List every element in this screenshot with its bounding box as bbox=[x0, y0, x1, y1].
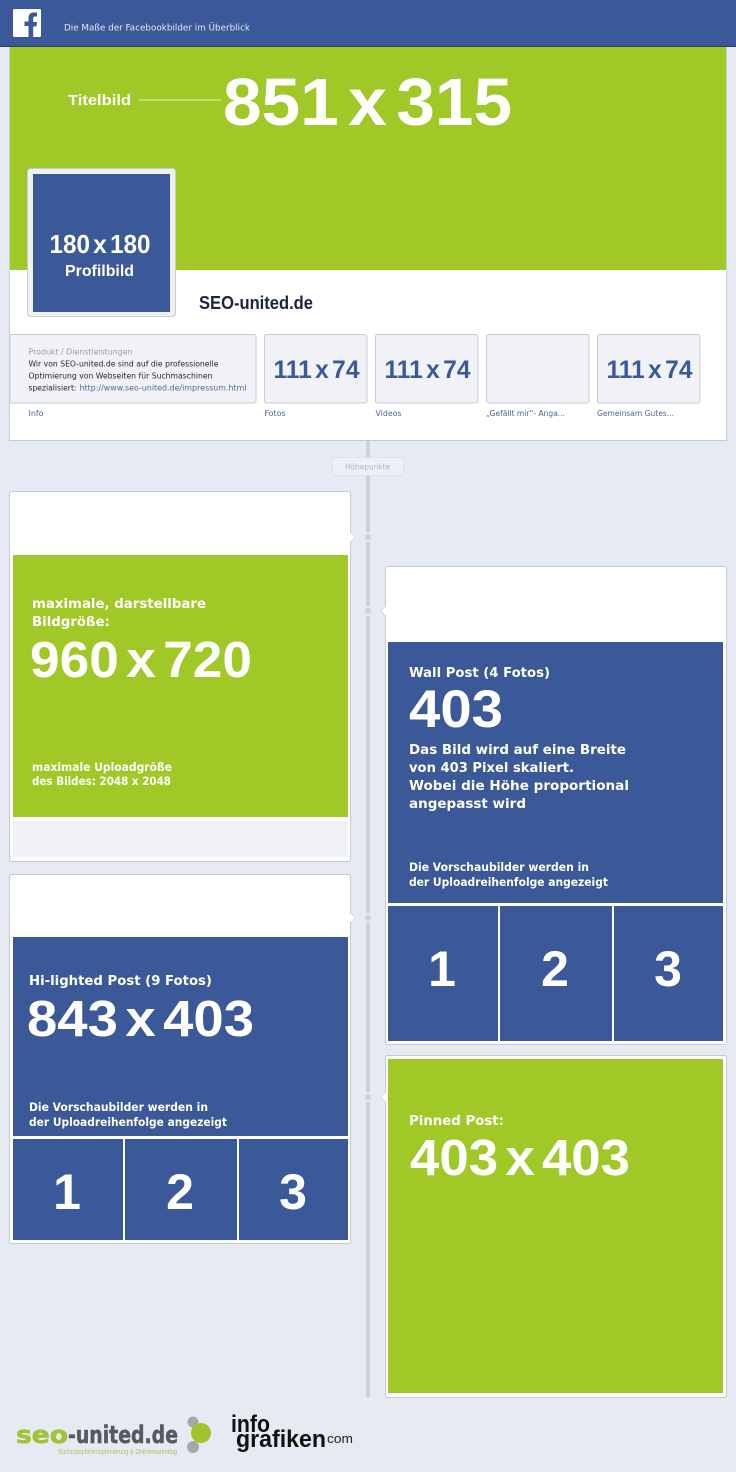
timeline line bbox=[366, 440, 370, 1397]
profile picture: Profilbild bbox=[65, 263, 134, 280]
blue image area bbox=[388, 642, 723, 903]
blue image area: Die Vorschaubilder werden in bbox=[29, 1100, 208, 1114]
info box bbox=[10, 334, 256, 403]
green image area: Bildgröße: bbox=[32, 614, 110, 630]
blue image area: Das Bild wird auf eine Breite bbox=[409, 742, 626, 758]
thumbnail: videos bbox=[376, 334, 478, 403]
header title: Die Maße der Facebookbilder im Überblick bbox=[64, 22, 251, 34]
thumbnail: common: 111 x 74 bbox=[606, 356, 693, 384]
thumbnail 1: 1 bbox=[53, 1164, 81, 1220]
logo: infografiken.com bbox=[231, 1411, 353, 1453]
page name: SEO-united.de bbox=[199, 292, 313, 313]
label: photos: Fotos bbox=[264, 409, 286, 418]
thumbnail 1 bbox=[388, 906, 498, 1041]
cover dimensions: 851 x 315 bbox=[223, 65, 512, 140]
thumbnail 3: 3 bbox=[279, 1164, 307, 1220]
logo: infografiken.com: info bbox=[231, 1411, 270, 1438]
logo: infografiken.com: com bbox=[327, 1431, 353, 1446]
green image area: maximale, darstellbare bbox=[32, 596, 206, 612]
logo: seo-united.de bbox=[16, 1416, 211, 1456]
info box: http://www.seo-united.de/impressum.html bbox=[80, 384, 246, 392]
green image area: 403 x 403 bbox=[410, 1129, 630, 1186]
thumbnail 2 bbox=[125, 1139, 237, 1240]
panel: maximum image size bbox=[10, 492, 356, 862]
blue image area: Wobei die Höhe proportional bbox=[409, 778, 629, 794]
label: videos: Videos bbox=[376, 409, 402, 418]
thumbnail: photos: 111 x 74 bbox=[274, 356, 360, 384]
blue image area: der Uploadreihenfolge angezeigt bbox=[29, 1115, 227, 1129]
info box: Optimierung von Webseiten für Suchmaschinen bbox=[28, 372, 212, 380]
green image area bbox=[13, 555, 348, 817]
thumbnail 3: 3 bbox=[654, 941, 682, 997]
info box: Produkt / Dienstleistungen bbox=[28, 348, 132, 356]
logo: seo-united.de: seo bbox=[16, 1421, 68, 1449]
green image area: maximale Uploadgröße bbox=[32, 760, 172, 774]
blue image area: 843 x 403 bbox=[27, 990, 254, 1047]
thumbnail 3 bbox=[614, 906, 723, 1041]
cover image bbox=[10, 47, 726, 270]
blue image area: Wall Post (4 Fotos) bbox=[409, 665, 550, 681]
blue image area: Hi-lighted Post (9 Fotos) bbox=[29, 973, 212, 989]
thumbnail 2 bbox=[500, 906, 612, 1041]
thumbnail: common bbox=[598, 334, 700, 403]
thumbnail 1: 1 bbox=[428, 941, 456, 997]
cover label: Titelbild bbox=[68, 92, 131, 109]
icon: facebook logo bbox=[13, 9, 41, 38]
thumbnail 1 bbox=[13, 1139, 123, 1240]
blue image area: der Uploadreihenfolge angezeigt bbox=[409, 875, 608, 889]
panel: profile card bbox=[10, 47, 726, 440]
blue image area: von 403 Pixel skaliert. bbox=[409, 760, 574, 776]
thumbnail 3 bbox=[239, 1139, 348, 1240]
green image area: Pinned Post: bbox=[409, 1113, 504, 1129]
thumbnail: photos bbox=[264, 334, 367, 403]
thumbnail 2: 2 bbox=[541, 941, 569, 997]
logo: infografiken.com: grafiken bbox=[236, 1426, 326, 1453]
blue image area: Die Vorschaubilder werden in bbox=[409, 860, 589, 874]
logo: seo-united.de: -united.de bbox=[68, 1421, 178, 1449]
timeline heading: Höhepunkte bbox=[345, 462, 390, 472]
info box: spezialisiert: bbox=[28, 384, 76, 392]
header bar bbox=[0, 0, 736, 47]
green image area bbox=[388, 1059, 723, 1393]
blue image area: 403 bbox=[409, 680, 503, 739]
label: info: Info bbox=[28, 409, 44, 418]
label: likes: „Gefällt mir“- Anga... bbox=[486, 409, 565, 418]
panel: wall post bbox=[380, 566, 726, 1044]
cover connector line bbox=[139, 100, 221, 101]
green image area: des Bildes: 2048 x 2048 bbox=[32, 774, 171, 788]
thumbnail: likes bbox=[486, 334, 589, 403]
blue image area: angepasst wird bbox=[409, 796, 526, 812]
timeline dots bbox=[364, 533, 372, 1101]
timeline heading bbox=[332, 458, 404, 476]
profile picture bbox=[28, 168, 176, 316]
panel: pinned post bbox=[380, 1056, 726, 1398]
logo: seo-united.de: Suchmaschinenoptimierung & Onlinemarketing bbox=[58, 1449, 177, 1456]
blue image area bbox=[13, 937, 348, 1136]
green image area: 960 x 720 bbox=[30, 631, 252, 688]
label: common: Gemeinsam Gutes... bbox=[597, 409, 674, 418]
thumbnail: videos: 111 x 74 bbox=[384, 356, 471, 384]
info box: Wir von SEO-united.de sind auf die professionelle bbox=[28, 360, 219, 368]
profile picture: 180 x 180 bbox=[50, 229, 150, 259]
grey caption strip bbox=[13, 821, 348, 857]
thumbnail 2: 2 bbox=[166, 1164, 194, 1220]
panel: hi-lighted post bbox=[10, 874, 356, 1244]
